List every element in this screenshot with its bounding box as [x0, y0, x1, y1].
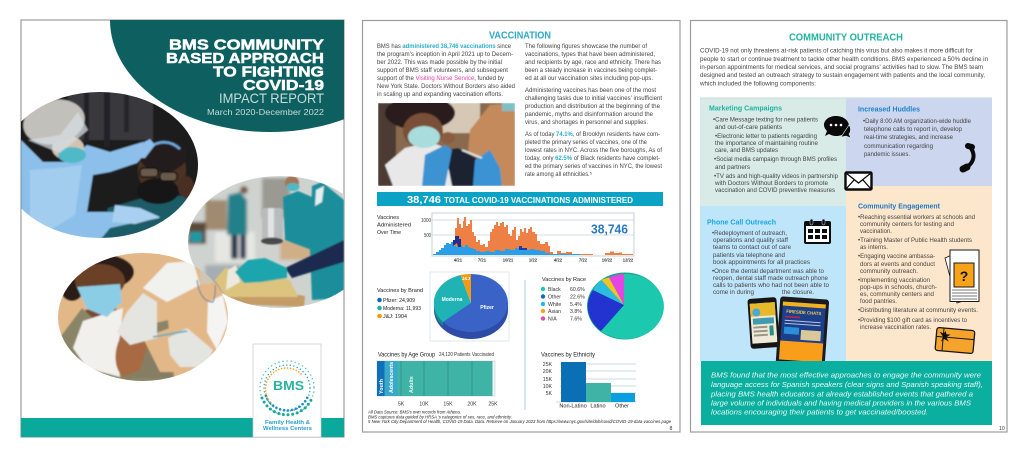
legend: vaccines by race: Other [548, 294, 561, 300]
photo: child being vaccinated [378, 96, 515, 186]
panel: marketing campaigns: with Doctors Without Borders to promote [714, 180, 828, 187]
chart: vaccines by age group: 10K [419, 402, 429, 408]
photo: person receiving vaccine [58, 253, 228, 381]
legend: vaccines by race: N/A [548, 316, 557, 322]
panel: cover page [20, 19, 345, 438]
panel: community engagement: community outreach. [860, 268, 918, 275]
intro paragraph [699, 48, 988, 88]
chart: brand pie: Moderna [442, 297, 463, 303]
panel: phone call outreach: come in during [713, 289, 754, 296]
panel: phone call outreach: book appointments for all practices [713, 259, 810, 266]
panel: phone call outreach: Phone Call Outreach [707, 220, 776, 226]
panel: community engagement: es, community centers and [860, 291, 934, 298]
vaccination heading: VACCINATION [489, 30, 551, 42]
chart label: Administered [377, 222, 411, 228]
chart: vaccines by age group: Vaccines by Age Group [378, 352, 436, 358]
right column text: Administering vaccines has been one of the most [525, 87, 656, 94]
panel: marketing campaigns: •TV ads and high-quality videos in partnership [714, 173, 838, 180]
chart: vaccines by ethnicity: 5K [546, 391, 553, 397]
chart: vaccines by age group: Youth [379, 379, 385, 394]
cover title: TO FIGHTING [213, 64, 324, 80]
chart: vaccines by age group: 25K [488, 402, 498, 408]
panel: community engagement: vaccination. [860, 228, 892, 235]
right column text: and recipients by age, race and ethnicity. There has [525, 59, 661, 66]
panel: community engagement: •Providing $100 gift card as incentives to [858, 317, 967, 324]
panel: phone call outreach: teams to contact out of care [713, 244, 791, 251]
panel: phone call outreach [700, 206, 846, 361]
time axis labels: 10/21 [503, 258, 514, 262]
panel: increased huddles: •Daily 8:00 AM organization-wide huddle [863, 118, 971, 125]
panel: marketing campaigns: •Care Message texting for new patients [713, 116, 818, 124]
chart: vaccines by ethnicity: Vaccines by Ethnicity [541, 352, 595, 358]
legend: vaccines by race [541, 277, 586, 322]
intro paragraph: people to start or continue treatment to tackle other health conditions. BMS experienced a 50% decline in [700, 56, 988, 63]
panel: community engagement: pop-ups in schools, church- [860, 284, 937, 291]
panel: marketing campaigns: •Social media campaign through BMS profiles [714, 156, 837, 163]
legend: vaccines by brand: Pfizer: 24,909 [383, 298, 415, 304]
footnotes [367, 410, 672, 424]
panel: marketing campaigns: the importance of maintaining routine [715, 140, 818, 147]
summary callout [701, 361, 992, 425]
left intro text: BMS has administered 38,746 vaccinations since [377, 43, 511, 50]
chart: vaccines by ethnicity: Non-Latino [559, 404, 587, 410]
teal footer band [21, 418, 344, 437]
legend: vaccines by race: White [548, 302, 561, 308]
chart: brand pie [430, 272, 509, 341]
panel: increased huddles: telephone calls to report in, develop [864, 126, 962, 133]
icon: envelope [846, 172, 872, 190]
panel: increased huddles: pandemic issues. [864, 151, 910, 158]
panel: marketing campaigns [700, 98, 992, 206]
legend: vaccines by race: 5.4% [570, 302, 582, 308]
logo card [253, 344, 321, 437]
chart: vaccines administered over time: 500 [424, 233, 431, 239]
chart: vaccines by age group: Adolescents [389, 362, 395, 393]
time axis labels: 7/22 [579, 258, 588, 262]
time axis labels [454, 258, 634, 262]
panel: community engagement: community centers for testing and [860, 221, 954, 228]
left intro text: support of BMS staff volunteers, and subsequent [377, 67, 508, 74]
chart: vaccines by ethnicity: Other [615, 404, 629, 410]
footnotes: BMS captures data guided by HRSA 's categories of sex, race, and ethnicity. [368, 414, 512, 420]
panel: increased huddles: Increased Huddles [858, 106, 920, 114]
right column text: vaccinations, types that have been administered, [525, 51, 655, 58]
total vaccinations banner: TOTAL COVID-19 VACCINATIONS ADMINISTERED [444, 196, 633, 205]
left intro text: support of the Visiting Nurse Service, funded by [377, 75, 505, 82]
left intro text [377, 43, 515, 98]
panel: phone call outreach: •Redeployment of outreach, [712, 230, 787, 237]
icon: flyer with question mark: ? [960, 268, 968, 284]
cover title: BASED APPROACH [166, 50, 324, 67]
panel: community engagement: dors at events and conduct [860, 261, 935, 268]
panel: increased huddles: communication regarding [864, 143, 933, 150]
time axis labels: 1/22 [529, 258, 538, 262]
legend: vaccines by brand: Moderna: 11,993 [383, 306, 421, 312]
panel: phone call outreach: calls to patients who had not been able to [713, 282, 829, 289]
panel: marketing campaigns: vaccination and COVID preventive measures [715, 187, 835, 194]
total figure: 38,746 [591, 222, 628, 236]
panel: marketing campaigns: and partners [715, 164, 750, 171]
chart: vaccines by age group: 15K [443, 402, 453, 408]
chart: brand pie: J&J [462, 276, 471, 281]
panel: community engagement: •Training Master of Public Health students [858, 237, 972, 244]
summary callout: BMS found that the most effective approaches to engage the community were [711, 370, 981, 380]
chart: vaccines by ethnicity: 15K [543, 377, 553, 383]
icon: calendar [804, 219, 831, 244]
icon: chat bubbles [824, 116, 851, 138]
panel: phone call outreach: •Once the dental department was able to [712, 268, 824, 275]
panel: phone call outreach: the closure. [782, 289, 814, 296]
panel: community engagement: increase vaccination rates. [860, 324, 931, 331]
chart: vaccines administered over time: 1000 [421, 218, 431, 224]
total vaccinations banner [377, 192, 663, 206]
logo dotted rings [260, 361, 314, 415]
chart: vaccines administered over time [377, 213, 634, 262]
intro paragraph: designed and tested an outreach strategy to sustain engagement with patients and the local community, [700, 72, 985, 79]
chart: vaccines by ethnicity: 25K [543, 362, 553, 368]
right column text: As of today 74.1%, of Brooklyn residents have com- [525, 131, 660, 138]
legend: vaccines by brand [377, 288, 423, 320]
left intro text: ber 2022. This was made possible by the initial [377, 59, 502, 66]
impact report subtitle: IMPACT REPORT [219, 90, 324, 106]
time axis labels: 12/22 [623, 258, 634, 262]
summary callout: placing BMS health educators at already established events that gathered a [710, 390, 973, 398]
footnotes: All Data Source: BMS's own records from Athena. [367, 410, 461, 414]
chart: vaccines by age group: 20K [467, 402, 477, 408]
panel: marketing campaigns: •Electronic letter to patients regarding [715, 133, 817, 140]
legend: vaccines by race: 7.6% [570, 316, 582, 322]
summary callout: locations encouraging their patients to get vaccinated/boosted. [711, 408, 928, 416]
time axis labels: 10/22 [602, 258, 613, 262]
chart: race pie [587, 272, 664, 340]
panel: marketing campaigns: and out-of-care patients [715, 124, 782, 131]
panel: community engagement: •Distributing literature at community events. [858, 307, 978, 314]
icon: flyer with question mark [945, 250, 979, 303]
panel: marketing campaigns: Marketing Campaigns [709, 106, 782, 112]
legend: vaccines by race: Asian [548, 309, 561, 315]
panel: community engagement: food pantries. [860, 298, 897, 305]
legend: vaccines by race: Black [548, 287, 561, 293]
right column text: pandemic, myths and disinformation around the [525, 111, 653, 118]
outreach heading: COMMUNITY OUTREACH [789, 32, 903, 44]
right column text: ed at all our vaccination sites including pop-ups. [525, 75, 653, 82]
panel: phone call outreach: reopen, dental staff made outreach phone [713, 275, 828, 282]
legend: vaccines by race: 22.6% [570, 294, 585, 300]
chart: vaccines by ethnicity: 10K [543, 384, 553, 390]
teal title blob [110, 20, 344, 132]
chart: brand pie: Pfizer [480, 305, 494, 311]
panel: community engagement: as interns. [860, 244, 888, 251]
panel: community engagement [846, 186, 992, 361]
right column text: rate among all ethnicities.⁵ [525, 171, 592, 178]
chart: vaccines by age group: Adults [409, 376, 415, 393]
panel: vaccination page [362, 20, 680, 432]
logo caption: Family Health & [265, 420, 310, 426]
panel: community engagement: Community Engagement [858, 204, 941, 210]
legend: vaccines by brand: Vaccines by Brand [377, 288, 423, 294]
right column text: lowest rates in NYC. Across the five boroughs, As of [525, 147, 662, 154]
time axis labels: 7/21 [478, 258, 487, 262]
chart label: Vaccines [377, 215, 399, 221]
summary callout: large volume of individuals and having medical providers in the various BMS [711, 398, 971, 408]
icon: telephone [963, 146, 974, 169]
page number: 10 [999, 426, 1005, 432]
legend: vaccines by race: Vaccines by Race [542, 277, 586, 283]
panel: marketing campaigns: care, and BMS updates [715, 147, 778, 154]
page number: 8 [670, 426, 672, 432]
column divider [524, 280, 526, 410]
right column text: been a steady increase in vaccines being complet- [525, 67, 657, 74]
intro paragraph: in-person appointments for medical services, and social programs' activities had to slow. The BMS team [700, 64, 983, 71]
summary callout: language access for Spanish speakers (clear signs and Spanish speaking staff), [711, 380, 983, 389]
footnotes: 5 New York City Department of Health, COVID-19 Data. Data. Retrieve on January 2023 from https://www.nyc.gov/site/doh/covid/COVID-19-data-vaccines.page [368, 419, 672, 424]
panel: community outreach page [690, 20, 1007, 432]
left intro text: in scaling up and expanding vaccination efforts. [377, 91, 503, 98]
panel: community engagement: •Implementing vaccination [858, 277, 930, 284]
icon: gift card [935, 327, 975, 354]
chart label: Over Time [377, 230, 401, 236]
total vaccinations banner: 38,746 [407, 195, 441, 206]
cover title: BMS COMMUNITY [169, 36, 324, 54]
left intro text: the program's inception in April 2021 up to Decem- [377, 51, 513, 58]
chart: vaccines by age group [377, 352, 498, 408]
chart: vaccines by ethnicity: 20K [543, 369, 553, 375]
time axis labels: 4/21 [454, 258, 463, 262]
logo wordmark: BMS [273, 378, 304, 393]
panel: increased huddles [846, 98, 992, 186]
panel: phone call outreach: patients via telephone and [713, 252, 785, 259]
icon: tablet with fireside chats flyer: FIRESIDE CHATS [786, 309, 821, 316]
intro paragraph: COVID-19 not only threatens at-risk patients of catching this virus but also makes it more difficult for [700, 48, 973, 54]
photo: clinician testing patient [21, 92, 198, 238]
right column text [525, 43, 662, 178]
legend: vaccines by race: 3.8% [570, 309, 582, 315]
right column text: production and distribution at the beginning of the [525, 103, 660, 110]
legend: vaccines by race: 60.6% [570, 287, 585, 293]
icon: small phone with flyer [747, 297, 780, 349]
time axis labels: 4/22 [554, 258, 563, 262]
panel: community engagement: •Engaging vaccine ambassa- [858, 253, 935, 260]
date range: March 2020-December 2022 [207, 107, 324, 117]
legend: vaccines by brand: J&J: 1904 [383, 314, 407, 320]
right column text: virus, and shortages in personnel and supplies. [525, 119, 648, 126]
right column text: challenging tasks due to initial vaccines' insufficient [525, 95, 662, 102]
photo: volunteers packing food [188, 176, 344, 308]
chart label [377, 215, 411, 236]
right column text: today, only 62.5% of Black residents have complet- [525, 155, 660, 162]
cover title: COVID-19 [243, 77, 324, 94]
logo caption [263, 420, 312, 432]
chart: vaccines by age group: 24,120 Patients Vaccinated [439, 352, 494, 358]
cover title [166, 36, 324, 94]
right column text: The following figures showcase the number of [525, 43, 647, 50]
chart: vaccines by ethnicity [541, 352, 636, 410]
intro paragraph: which included the following components: [699, 80, 816, 88]
chart: vaccines by ethnicity: Latino [590, 404, 606, 410]
panel: community engagement: •Reaching essential workers at schools and [858, 214, 975, 221]
icon: tablet with fireside chats flyer [776, 296, 829, 368]
right column text: pleted the primary series of vaccines, one of the [525, 139, 647, 146]
chart: vaccines by age group: 5K [398, 402, 405, 408]
panel: phone call outreach: operations and quality staff [713, 237, 788, 244]
right column text: ed the primary series of vaccines in NYC, the lowest [525, 163, 662, 170]
left intro text: New York State. Doctors Without Borders also aided [377, 83, 515, 90]
logo caption: Wellness Centers [263, 426, 312, 432]
panel: increased huddles: real-time strategies, and increase [864, 134, 953, 141]
